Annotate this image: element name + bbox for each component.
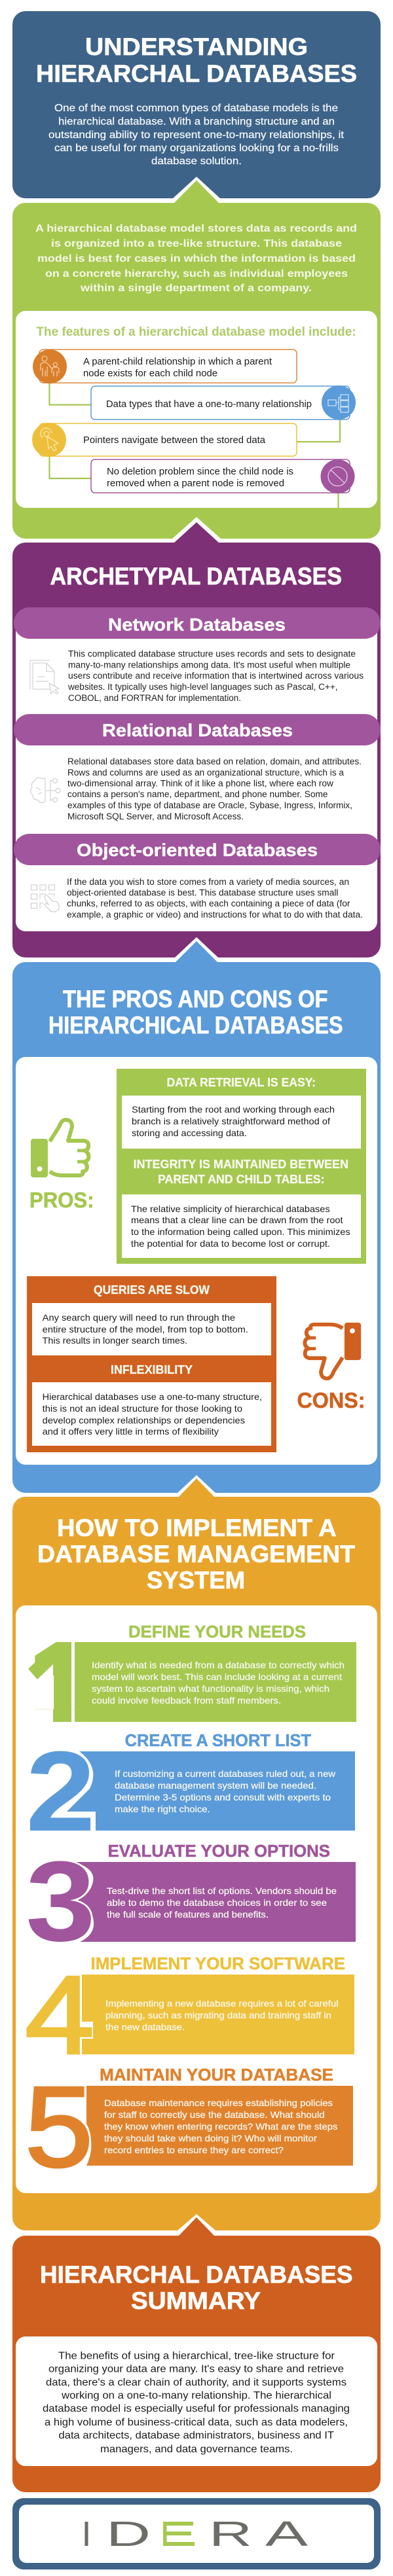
body text: users contribute and receive information that is intertwined across various bbox=[68, 671, 364, 681]
icon: brain network bbox=[31, 778, 60, 803]
icon: no sign bbox=[321, 459, 355, 493]
step text: able to demo the database choices in order to see bbox=[107, 1897, 327, 1908]
feature text: No deletion problem since the child node is bbox=[107, 467, 293, 477]
number 4: 4 bbox=[25, 1954, 94, 2077]
description text: A hierarchical database model stores data as records and bbox=[35, 223, 357, 234]
pros list: to the information being called upon. This minimizes bbox=[131, 1226, 350, 1237]
summary text box: data architects, database administrators, business and IT bbox=[59, 2430, 334, 2441]
panel: introduction bbox=[12, 11, 381, 198]
summary text box: database model is especially useful for professionals managing bbox=[43, 2403, 350, 2414]
cons list: Any search query will need to run through the bbox=[43, 1312, 235, 1323]
heading bbox=[48, 986, 343, 1039]
connector lines bbox=[50, 383, 340, 508]
panel: archetypal databases bbox=[12, 517, 381, 957]
pros list: Starting from the root and working through each bbox=[132, 1104, 335, 1115]
body text bbox=[67, 877, 363, 920]
features heading: The features of a hierarchical database model include: bbox=[37, 325, 356, 339]
body text bbox=[67, 649, 364, 703]
pros list: INTEGRITY IS MAINTAINED BETWEEN bbox=[134, 1158, 348, 1171]
step text: Determine 3-5 options and consult with experts to bbox=[115, 1792, 331, 1802]
icon: document with cursor bbox=[30, 660, 59, 694]
heading: HIERARCHICAL DATABASES bbox=[48, 1012, 343, 1039]
icon: grid with hand bbox=[31, 885, 59, 912]
step 3 bbox=[26, 1837, 356, 1965]
body text bbox=[67, 757, 362, 821]
pros list: The relative simplicity of hierarchical databases bbox=[131, 1204, 330, 1214]
step 1: DEFINE YOUR NEEDS bbox=[128, 1622, 306, 1641]
pros label: PROS: bbox=[29, 1188, 94, 1212]
cons list: this is not an ideal structure for those looking to bbox=[43, 1403, 242, 1414]
pros list: DATA RETRIEVAL IS EASY: bbox=[166, 1076, 316, 1089]
cons list: INFLEXIBILITY bbox=[111, 1363, 193, 1376]
pros list: PARENT AND CHILD TABLES: bbox=[158, 1173, 325, 1186]
step 5: MAINTAIN YOUR DATABASE bbox=[100, 2065, 333, 2084]
relational databases bbox=[14, 714, 381, 821]
step text: Identify what is needed from a database to correctly which bbox=[92, 1660, 345, 1670]
body text: object-oriented database is best. This database structure uses small bbox=[67, 887, 338, 898]
cons list: develop complex relationships or dependencies bbox=[43, 1415, 245, 1425]
body text: Microsoft SQL Server, and Microsoft Access. bbox=[67, 812, 244, 821]
body text: This complicated database structure uses records and sets to designate bbox=[68, 649, 356, 658]
intro text: can be useful for many organizations looking for a no-frills bbox=[54, 143, 339, 154]
feature 4 bbox=[91, 459, 355, 493]
pros list: means that a clear line can be drawn from the root bbox=[131, 1215, 343, 1225]
number 2: 2 bbox=[26, 1727, 96, 1855]
description text: is organized into a tree-like structure. This database bbox=[51, 238, 342, 249]
step text bbox=[115, 1768, 336, 1814]
footer logo panel bbox=[12, 2498, 381, 2569]
step text bbox=[105, 1998, 339, 2032]
intro text: outstanding ability to represent one-to-many relationships, it bbox=[48, 130, 345, 141]
object-oriented databases bbox=[14, 834, 381, 920]
summary text box: managers, and data governance teams. bbox=[100, 2444, 293, 2455]
step text bbox=[104, 2098, 338, 2155]
body text: COBOL, and FORTRAN for implementation. bbox=[68, 693, 241, 703]
intro text: hierarchical database. With a branching structure and an bbox=[58, 116, 335, 127]
body text: two-dimensional array. Think of it like a phone list, where each row bbox=[67, 779, 333, 788]
network databases bbox=[14, 607, 381, 703]
feature 1 bbox=[33, 349, 297, 384]
step text: model will work best. This can include looking at a current bbox=[92, 1672, 342, 1682]
heading: THE PROS AND CONS OF bbox=[63, 986, 328, 1012]
body text: Rows and columns are used as an organizational structure, which is a bbox=[67, 768, 344, 778]
logo: IDERA: I bbox=[81, 2514, 92, 2554]
heading: HIERARCHAL DATABASES bbox=[40, 2261, 352, 2288]
heading: DATABASE MANAGEMENT bbox=[37, 1541, 355, 1567]
feature text: A parent-child relationship in which a parent bbox=[83, 357, 272, 367]
step 1 bbox=[28, 1626, 356, 1722]
body text: If the data you wish to store comes from a variety of media sources, an bbox=[67, 877, 349, 887]
heading: ARCHETYPAL DATABASES bbox=[50, 563, 342, 590]
header pill bbox=[14, 607, 381, 639]
step text: If customizing a current databases ruled out, a new bbox=[115, 1768, 336, 1779]
step text: database management system will be needed. bbox=[115, 1780, 316, 1791]
header pill bbox=[14, 714, 381, 745]
body text: examples of this type of database are Oracle, Sybase, Ingress, Informix, bbox=[67, 800, 352, 810]
cons label: CONS: bbox=[297, 1388, 365, 1412]
pros list: storing and accessing data. bbox=[132, 1128, 247, 1138]
number 1 bbox=[28, 1642, 75, 1722]
step text: make the right choice. bbox=[115, 1804, 210, 1814]
title: UNDERSTANDING bbox=[85, 33, 308, 60]
body text: websites. It typically uses high-level languages such as Pascal, C++, bbox=[67, 682, 337, 692]
icon: hierarchy bbox=[322, 385, 356, 420]
feature text: node exists for each child node bbox=[83, 368, 217, 379]
summary text box: organizing your data are many. It's easy to share and retrieve bbox=[48, 2364, 344, 2374]
step text bbox=[107, 1886, 337, 1920]
step text: Implementing a new database requires a lot of careful bbox=[105, 1998, 339, 2009]
step text: the full scale of features and benefits. bbox=[107, 1909, 269, 1920]
feature text bbox=[107, 467, 293, 489]
icon: pointer bbox=[32, 423, 66, 457]
title bbox=[36, 33, 357, 87]
pros list: branch is a relatively straightforward method of bbox=[132, 1116, 330, 1126]
step text: the new database. bbox=[105, 2022, 185, 2032]
step text bbox=[92, 1660, 345, 1706]
icon: parent and child bbox=[33, 349, 67, 384]
body text: contains a person's name, department, and phone number. Some bbox=[67, 789, 328, 799]
step text: record entries to ensure they are correct? bbox=[104, 2145, 284, 2155]
feature text bbox=[83, 357, 272, 379]
step text: they know when entering records? What are the steps bbox=[104, 2121, 338, 2132]
description text: on a concrete hierarchy, such as individual employees bbox=[45, 268, 348, 279]
header pill: Object-oriented Databases bbox=[77, 840, 318, 860]
pros bbox=[29, 1069, 366, 1264]
step 2 bbox=[26, 1727, 355, 1855]
cons list: This results in longer search times. bbox=[43, 1335, 187, 1346]
body text: many-to-many relationships among data. It's most useful when multiple bbox=[68, 660, 350, 670]
description text bbox=[35, 223, 357, 294]
logo: IDERA: R bbox=[209, 2514, 252, 2554]
logo: IDERA: E bbox=[153, 2514, 197, 2554]
feature text: removed when a parent node is removed bbox=[107, 478, 284, 489]
number 5: 5 bbox=[25, 2063, 93, 2191]
cons list: Hierarchical databases use a one-to-many structure, bbox=[43, 1391, 262, 1402]
pros list bbox=[117, 1069, 366, 1264]
step 3: EVALUATE YOUR OPTIONS bbox=[108, 1841, 330, 1861]
panel: pros and cons bbox=[12, 937, 381, 1493]
number 1: 1 bbox=[28, 1619, 92, 1746]
cons list bbox=[27, 1276, 276, 1452]
heading: SYSTEM bbox=[147, 1567, 245, 1594]
feature text: Data types that have a one-to-many relationship bbox=[106, 399, 312, 410]
step text: Test-drive the short list of options. Vendors should be bbox=[107, 1886, 337, 1896]
cons bbox=[27, 1276, 365, 1452]
heading bbox=[40, 2261, 352, 2314]
step text: they should take when doing it? Who will monitor bbox=[104, 2133, 317, 2143]
summary text box: working on a one-to-many relationship. The hierarchical bbox=[61, 2390, 331, 2401]
logo: IDERA: A bbox=[265, 2514, 308, 2554]
step text: for staff to correctly use the database. What should bbox=[104, 2109, 325, 2120]
cons list: QUERIES ARE SLOW bbox=[94, 1283, 210, 1297]
step text: could involve feedback from staff members. bbox=[92, 1695, 281, 1706]
step text: system to ascertain what functionality is missing, which bbox=[92, 1683, 329, 1694]
intro text: One of the most common types of database models is the bbox=[54, 103, 338, 114]
header pill bbox=[14, 834, 381, 865]
feature 2 bbox=[91, 385, 356, 420]
icon: thumbs down bbox=[305, 1323, 361, 1378]
header pill: Network Databases bbox=[108, 615, 286, 635]
summary text box: a high volume of business-critical data, such as data modelers, bbox=[45, 2417, 348, 2428]
feature text: Pointers navigate between the stored data bbox=[83, 435, 266, 446]
description text: within a single department of a company. bbox=[80, 283, 312, 294]
body text: chunks, referred to as objects, with each containing a piece of data (for bbox=[67, 899, 350, 908]
number 3: 3 bbox=[26, 1837, 96, 1965]
pros list: the potential for data to become lost or corrupt. bbox=[131, 1238, 330, 1249]
step 5 bbox=[25, 2063, 353, 2191]
heading: SUMMARY bbox=[131, 2287, 261, 2314]
body text: example, a graphic or video) and instructions for what to do with that data. bbox=[67, 910, 363, 920]
panel: hierarchical database model bbox=[12, 177, 381, 539]
intro text bbox=[48, 103, 345, 167]
icon: thumbs up bbox=[31, 1120, 88, 1177]
description text: model is best for cases in which the information is based bbox=[37, 253, 356, 264]
cons list: and it offers very little in terms of flexibility bbox=[43, 1426, 219, 1437]
header pill: Relational Databases bbox=[102, 721, 293, 740]
cons list: entire structure of the model, from top to bottom. bbox=[43, 1324, 248, 1334]
logo: IDERA: D bbox=[106, 2514, 151, 2554]
step 2: CREATE A SHORT LIST bbox=[125, 1730, 311, 1750]
title: HIERARCHAL DATABASES bbox=[36, 60, 357, 87]
step 4: IMPLEMENT YOUR SOFTWARE bbox=[90, 1954, 345, 1973]
panel: features bbox=[16, 311, 377, 508]
summary text box bbox=[16, 2336, 377, 2466]
feature 3 bbox=[32, 423, 297, 457]
intro text: database solution. bbox=[151, 156, 242, 167]
body text: Relational databases store data based on relation, domain, and attributes. bbox=[67, 757, 362, 766]
step text: planning, such as migrating data and training staff in bbox=[105, 2010, 331, 2020]
logo: IDERA bbox=[85, 2521, 308, 2546]
heading: HOW TO IMPLEMENT A bbox=[57, 1514, 337, 1541]
heading bbox=[37, 1514, 355, 1594]
panel: summary bbox=[12, 2214, 381, 2492]
panel: how to implement bbox=[12, 1475, 381, 2230]
summary text box: data, there's a clear chain of authority, and it supports systems bbox=[46, 2377, 346, 2388]
step 4 bbox=[25, 1954, 354, 2077]
step text: Database maintenance requires establishing policies bbox=[104, 2098, 333, 2108]
summary text box: The benefits of using a hierarchical, tree-like structure for bbox=[58, 2351, 335, 2361]
